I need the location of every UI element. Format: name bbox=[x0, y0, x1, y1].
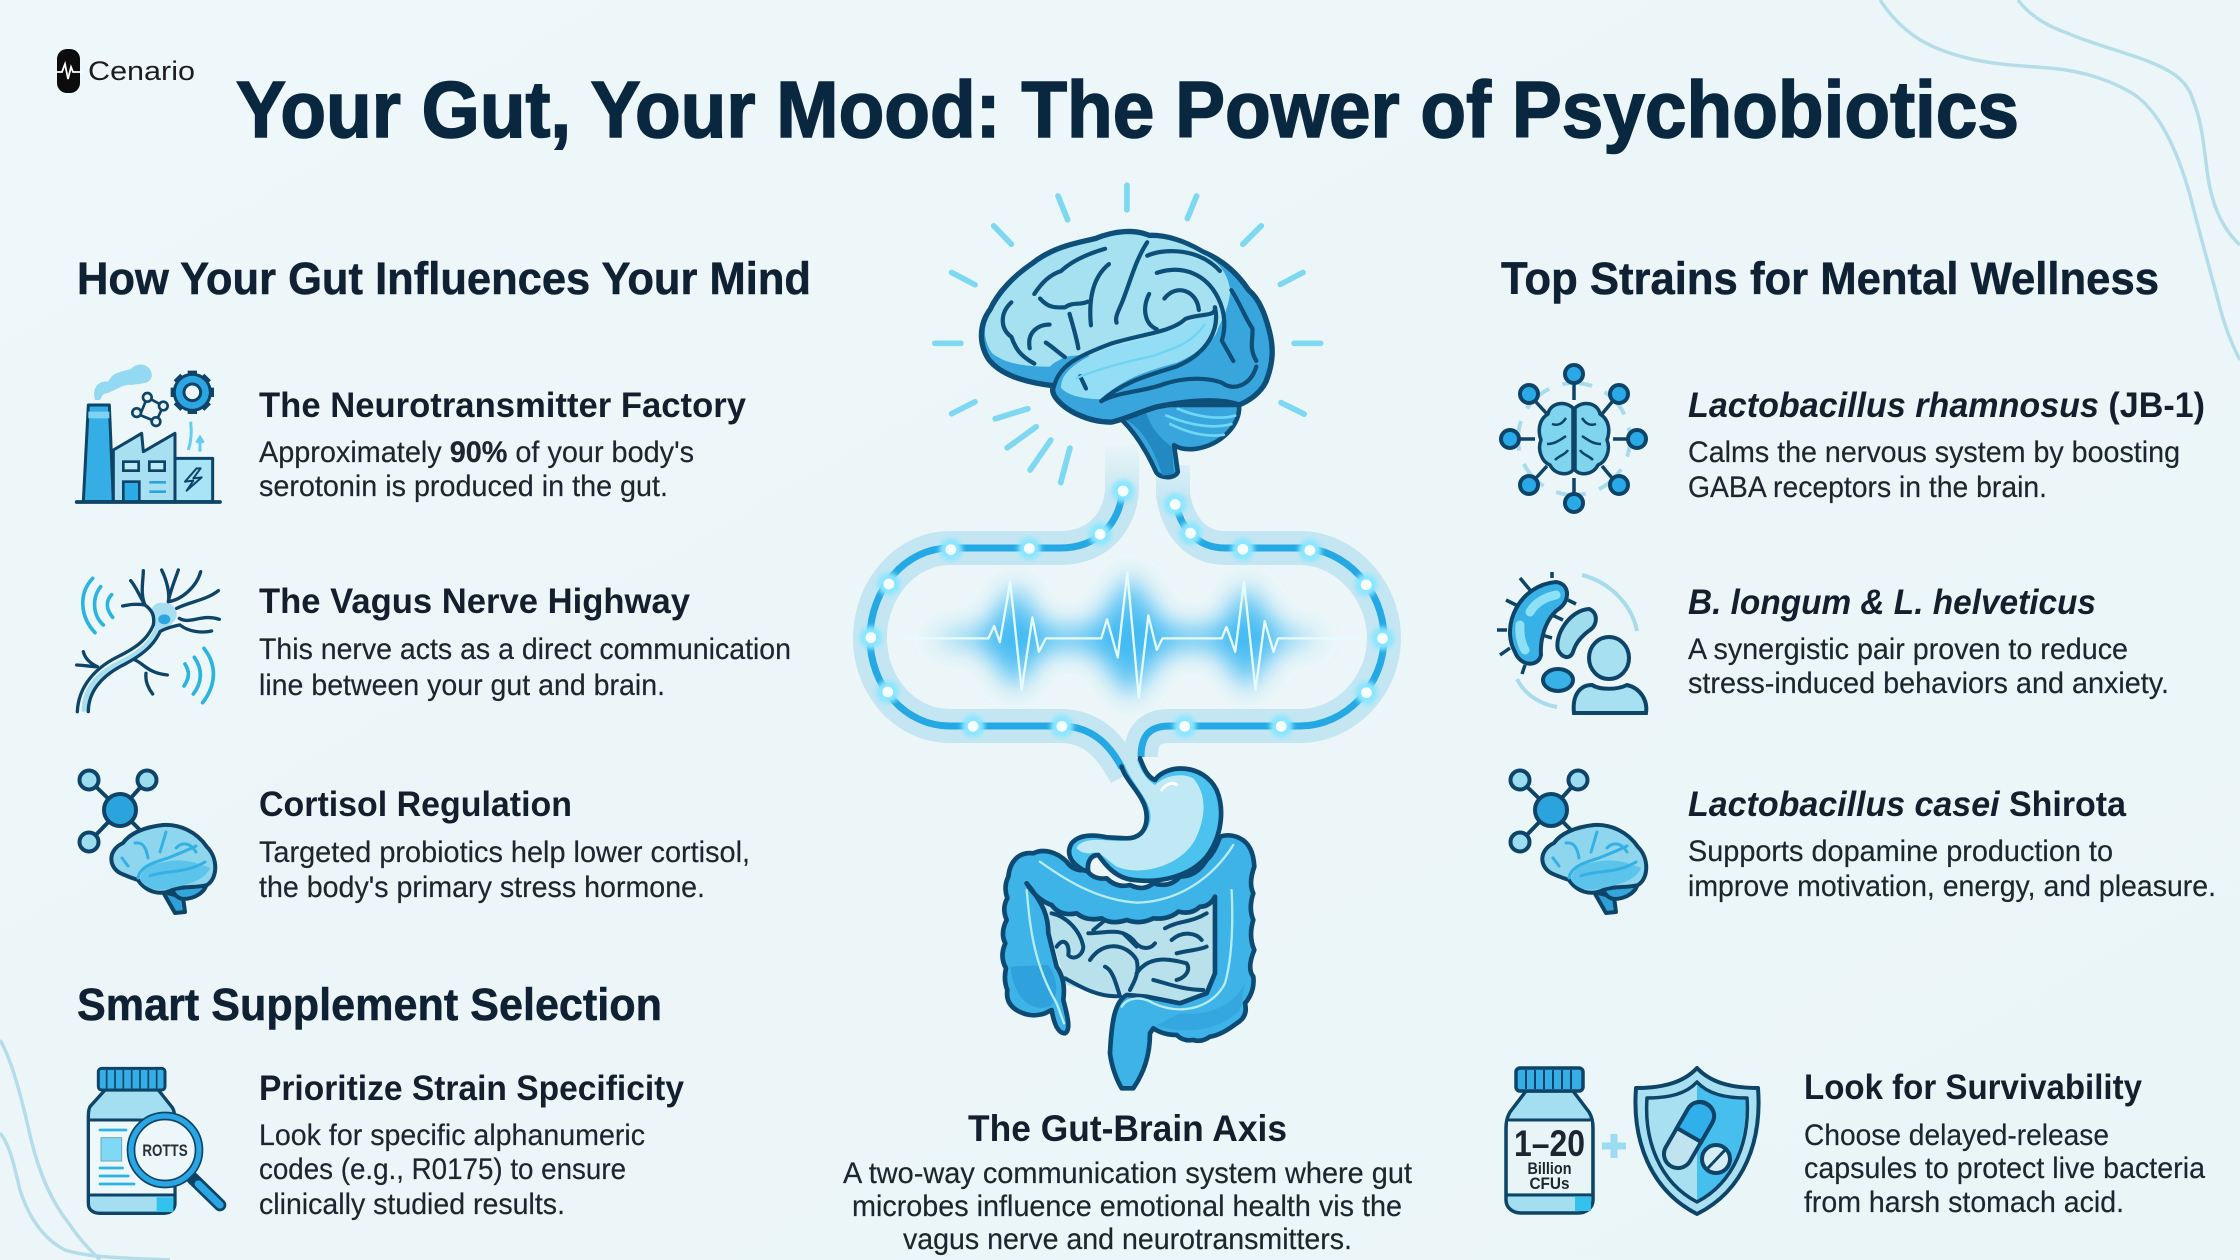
icon: gut bbox=[1002, 758, 1254, 1088]
item text: from harsh stomach acid. bbox=[1804, 1186, 2124, 1219]
caption: the gut-brain axis: A two-way communication system where gut bbox=[843, 1157, 1413, 1190]
item text: The Neurotransmitter Factory bbox=[259, 386, 747, 425]
heading: how your gut influences your mind: How Your Gut Influences Your Mind bbox=[77, 253, 811, 304]
cerebellum and stem bbox=[1122, 405, 1239, 477]
icon: bottle with magnifier: ROTTS bbox=[142, 1141, 188, 1160]
item text: The Vagus Nerve Highway bbox=[259, 582, 691, 621]
icon: shield with capsule bbox=[1635, 1068, 1759, 1214]
icon: factory bbox=[77, 365, 220, 502]
small intestine bbox=[1040, 897, 1217, 1007]
panel: how your gut influences your mind bbox=[77, 253, 811, 913]
icon: molecule and brain bbox=[1510, 770, 1646, 913]
icon: brain network bbox=[1501, 365, 1646, 512]
colon bbox=[1002, 835, 1254, 1088]
item text: capsules to protect live bacteria bbox=[1804, 1152, 2205, 1185]
item text: B. longum & L. helveticus bbox=[1688, 583, 2096, 622]
item text: Approximately 90% of your body's bbox=[259, 436, 694, 469]
item text: Targeted probiotics help lower cortisol, bbox=[259, 836, 750, 869]
heading: smart supplement selection: Smart Supplement Selection bbox=[77, 979, 662, 1030]
glowing nodes bbox=[859, 480, 1394, 738]
item text: This nerve acts as a direct communication bbox=[259, 633, 791, 666]
item text: Calms the nervous system by boosting bbox=[1688, 436, 2180, 469]
item text: serotonin is produced in the gut. bbox=[259, 470, 668, 503]
item text: improve motivation, energy, and pleasure. bbox=[1688, 870, 2216, 903]
icon: bottle 1-20 billion CFUs: Billion bbox=[1528, 1159, 1572, 1178]
icon: plus bbox=[1602, 1134, 1626, 1158]
icon: brain with rays bbox=[935, 185, 1321, 483]
icon: bottle with magnifier bbox=[88, 1068, 220, 1213]
heading: top strains for mental wellness: Top Strains for Mental Wellness bbox=[1501, 253, 2159, 304]
cerebrum bbox=[981, 231, 1272, 422]
chart: gut-brain axis diagram bbox=[843, 185, 1413, 1256]
item text bbox=[259, 785, 750, 904]
item text: Choose delayed-release bbox=[1804, 1119, 2109, 1152]
intestine folds bbox=[1052, 913, 1207, 996]
item text: line between your gut and brain. bbox=[259, 669, 665, 702]
item text: Lactobacillus casei Shirota bbox=[1688, 785, 2127, 824]
connection tube bbox=[870, 445, 1384, 775]
icon: bacteria and person bbox=[1497, 572, 1646, 713]
item text: Look for Survivability bbox=[1804, 1068, 2142, 1107]
icon: bottle 1-20 billion CFUs bbox=[1506, 1068, 1593, 1213]
item text: Cortisol Regulation bbox=[259, 785, 572, 824]
title: Your Gut, Your Mood: The Power of Psychobiotics bbox=[236, 65, 2019, 154]
caption: the gut-brain axis bbox=[843, 1108, 1413, 1256]
item text: Lactobacillus rhamnosus (JB-1) bbox=[1688, 386, 2205, 425]
logo: Cenario bbox=[88, 56, 195, 86]
item text: Prioritize Strain Specificity bbox=[259, 1069, 685, 1108]
item text: Look for specific alphanumeric bbox=[259, 1119, 645, 1152]
item text: Supports dopamine production to bbox=[1688, 835, 2113, 868]
item text: codes (e.g., R0175) to ensure bbox=[259, 1153, 626, 1186]
item text: A synergistic pair proven to reduce bbox=[1688, 633, 2128, 666]
item text: clinically studied results. bbox=[259, 1188, 565, 1221]
caption: the gut-brain axis: The Gut-Brain Axis bbox=[968, 1108, 1287, 1149]
item text: GABA receptors in the brain. bbox=[1688, 471, 2047, 504]
item: the vagus nerve highway bbox=[77, 570, 791, 712]
caption: the gut-brain axis: microbes influence emotional health vis the bbox=[852, 1190, 1402, 1223]
item: cortisol regulation bbox=[80, 770, 750, 913]
item: lactobacillus rhamnosus bbox=[1501, 365, 2205, 512]
item text: the body's primary stress hormone. bbox=[259, 871, 705, 904]
panel: look for survivability bbox=[1506, 1068, 2205, 1219]
item text bbox=[1688, 785, 2216, 903]
icon: neuron bbox=[77, 570, 219, 712]
item text bbox=[1688, 583, 2169, 700]
stomach bbox=[1069, 758, 1221, 881]
heartbeat signal bbox=[904, 573, 1356, 698]
icon: molecule and brain bbox=[80, 770, 215, 913]
item text bbox=[259, 582, 791, 702]
item text bbox=[259, 386, 747, 503]
item: the neurotransmitter factory bbox=[77, 365, 747, 503]
icon: bottle 1-20 billion CFUs: 1–20 bbox=[1514, 1123, 1585, 1164]
item text: stress-induced behaviors and anxiety. bbox=[1688, 667, 2169, 700]
panel: smart supplement selection bbox=[77, 979, 685, 1221]
item text bbox=[1688, 386, 2205, 504]
item text bbox=[1804, 1068, 2205, 1219]
item: lactobacillus casei shirota bbox=[1510, 770, 2216, 913]
item: b. longum and l. helveticus bbox=[1497, 572, 2169, 713]
rays bbox=[935, 185, 1321, 483]
icon: bottle 1-20 billion CFUs: CFUs bbox=[1530, 1174, 1570, 1193]
panel: top strains for mental wellness bbox=[1497, 253, 2216, 913]
logo bbox=[55, 49, 195, 93]
item text bbox=[259, 1069, 685, 1221]
caption: the gut-brain axis: vagus nerve and neurotransmitters. bbox=[903, 1223, 1352, 1256]
